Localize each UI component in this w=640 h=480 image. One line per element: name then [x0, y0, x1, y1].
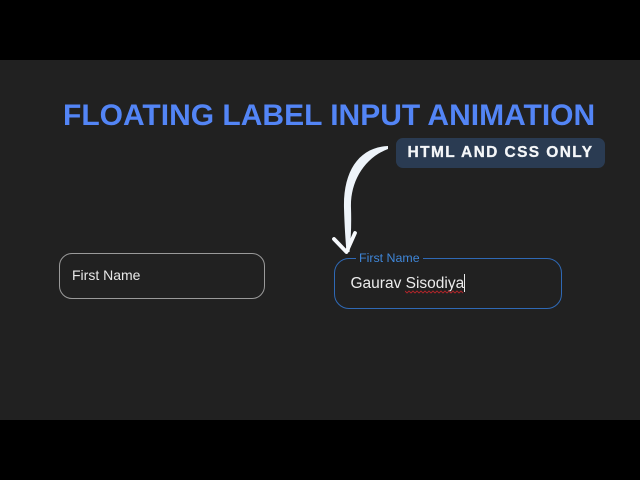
arrow: curved from callout to input: [332, 146, 388, 254]
input placeholder label: First Name: [72, 267, 140, 283]
spellcheck underline: [405, 290, 464, 294]
callout: HTML and CSS only: HTML AND CSS ONLY: [408, 144, 594, 161]
input: default state: [59, 253, 265, 299]
title: FLOATING LABEL INPUT ANIMATION: [63, 99, 595, 132]
floating label: First Name: [359, 250, 420, 264]
text cursor: [464, 274, 465, 292]
typed value: Gaurav Sisodiya: [350, 274, 464, 292]
panel: dark video frame: [0, 60, 640, 420]
input: focused state: [334, 258, 562, 309]
callout: HTML and CSS only: [396, 138, 605, 168]
